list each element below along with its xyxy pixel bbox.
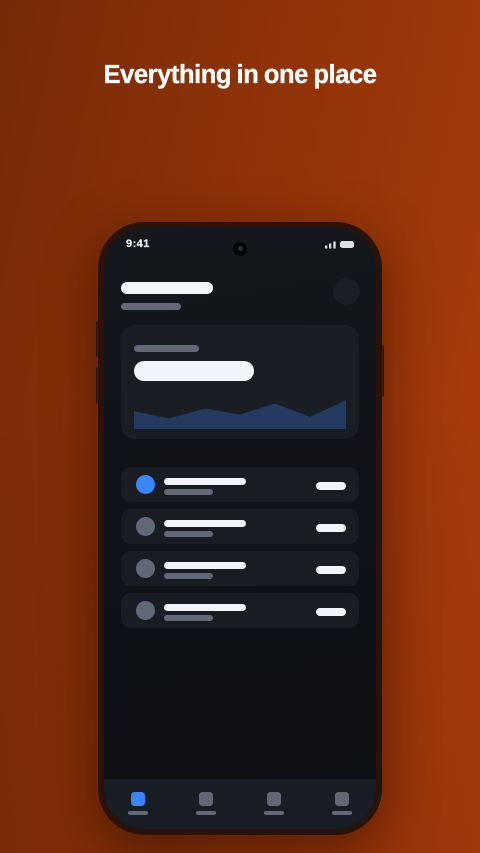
nav tab 3: [264, 792, 284, 815]
nav icon: [131, 792, 145, 806]
row icon: [136, 475, 154, 494]
screen: [104, 228, 376, 829]
nav label: [332, 811, 352, 815]
card value: [134, 360, 254, 381]
panel: summary card: [121, 325, 359, 439]
nav icon: [335, 792, 349, 806]
nav label: [264, 811, 284, 815]
nav icon: [199, 792, 213, 806]
row value: [316, 566, 346, 574]
row title: [164, 520, 246, 527]
row value: [316, 482, 346, 490]
list row 2: [121, 509, 359, 544]
signal icon: [325, 242, 336, 248]
row title: [164, 478, 246, 485]
row value: [316, 524, 346, 532]
phone body: [98, 222, 382, 835]
nav tab 1: [128, 792, 148, 815]
battery icon: [340, 241, 354, 248]
row subtitle: [164, 572, 213, 578]
row icon: [136, 559, 154, 578]
nav label: [196, 811, 216, 815]
list row 4: [121, 593, 359, 628]
row icon: [136, 601, 154, 620]
list row 1: [121, 467, 359, 502]
row subtitle: [164, 614, 213, 620]
row title: [164, 604, 246, 611]
power button: [380, 345, 384, 397]
row subtitle: [164, 530, 213, 536]
camera: [233, 242, 247, 256]
nav label: [128, 811, 148, 815]
header subtitle: [120, 302, 180, 310]
nav tab 2: [196, 792, 216, 815]
header title: [120, 282, 213, 294]
bottom navigation: [104, 779, 376, 829]
list row 3: [121, 551, 359, 586]
card label: [134, 344, 199, 352]
phone: [73, 208, 412, 853]
side buttons: [96, 321, 98, 404]
row value: [316, 608, 346, 616]
row icon: [136, 517, 154, 536]
nav tab 4: [332, 792, 352, 815]
title: Everything in one place: [104, 61, 376, 89]
area chart: [134, 400, 346, 429]
status time: 9:41: [126, 238, 150, 250]
row title: [164, 562, 246, 569]
row subtitle: [164, 488, 213, 494]
nav icon: [267, 792, 281, 806]
avatar: [333, 278, 360, 305]
